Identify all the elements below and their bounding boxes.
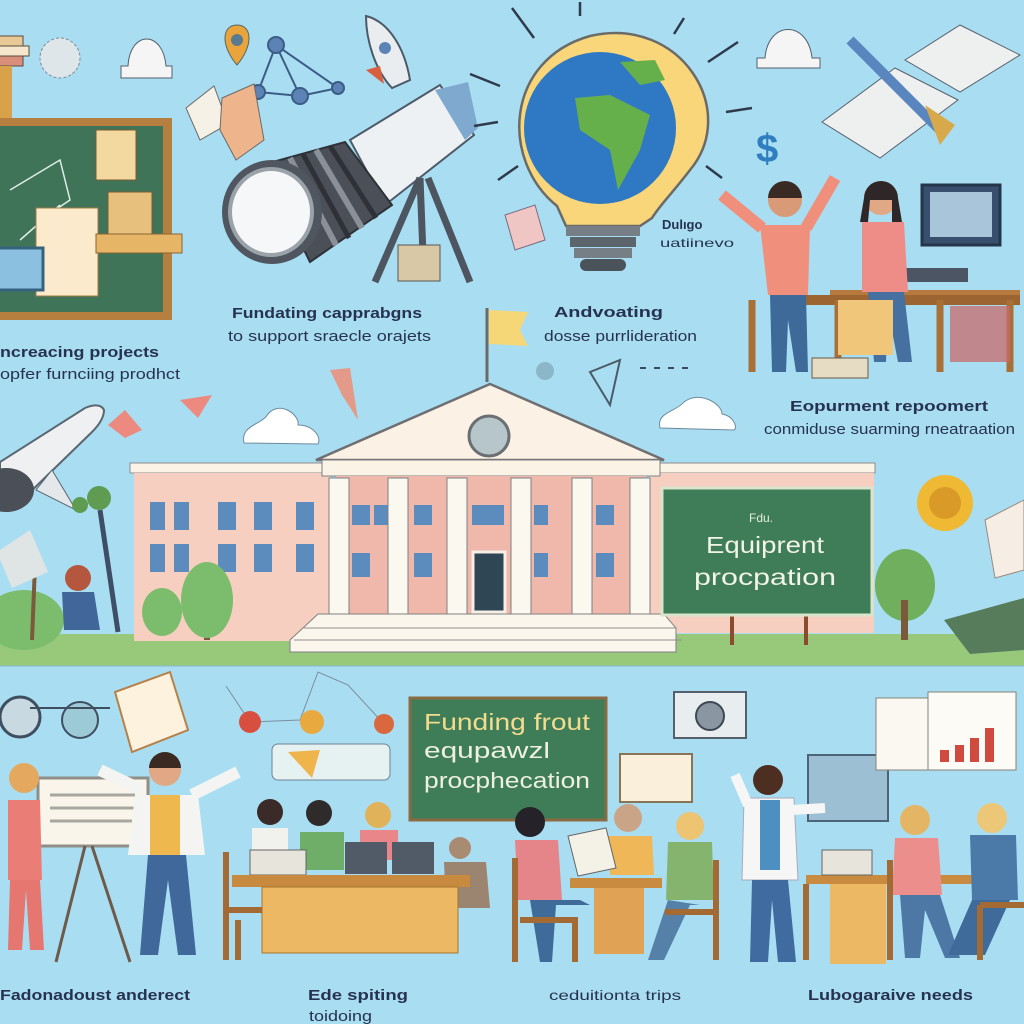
text: dulgo: uatiinevo [660, 236, 734, 250]
text: equipment report: Eopurment repoomert [790, 398, 988, 415]
sign: funding front [410, 698, 606, 820]
scene: team at desk with laptops [226, 799, 490, 960]
text: bottom caption 3: ceduitionta trips [549, 987, 681, 1003]
text: dulgo: Dulıgo [662, 217, 702, 232]
building: central portico [290, 384, 682, 652]
text: increasing projects: ncreacing projects [0, 344, 159, 361]
text: equipment report [764, 398, 1015, 438]
icon: star figures [108, 410, 142, 438]
icons right: coin and papers [917, 475, 1024, 654]
sign: funding front: equpawzl [424, 738, 550, 763]
panel: chalkboard top left [0, 118, 182, 320]
lower section divider [0, 665, 1024, 667]
trees [0, 549, 935, 650]
icon: network nodes [226, 672, 394, 780]
scene: group at table [515, 804, 718, 962]
text: funding campaigns: Fundating capprabgns [232, 305, 422, 322]
sign: equipment preparation: Fdu. [749, 511, 773, 525]
icon: hand card [505, 205, 545, 250]
icon: rocket [366, 16, 410, 88]
building: right wing [650, 473, 874, 633]
icon: dollar sign: $ [756, 127, 778, 171]
icon: gear sphere [40, 38, 80, 78]
sign: equipment preparation: Equiprent [706, 532, 825, 558]
icon: books top left [0, 36, 29, 118]
small decorations mid [330, 360, 690, 420]
text: bottom caption 4: Lubogaraive needs [808, 987, 973, 1004]
icon: dome right [757, 30, 820, 68]
icon: molecule [251, 37, 344, 104]
icon: dome [121, 39, 172, 78]
scene: desk with two women [806, 803, 1024, 964]
text: bottom caption 2: Ede spiting [308, 987, 408, 1004]
icon: paper shapes [186, 84, 264, 160]
sign: funding front: Funding frout [424, 709, 591, 735]
text: annovating: Andvoating [554, 304, 663, 321]
sign: equipment preparation: procpation [694, 564, 836, 590]
scene: presenter in white coat [735, 765, 825, 962]
text: increasing projects: opfer furnciing prodhct [0, 366, 181, 383]
text: bottom caption 2 [308, 987, 408, 1024]
text: bottom caption 1: Fadonadoust anderect [0, 987, 190, 1004]
icon: machine [808, 755, 888, 821]
text: equipment report: conmiduse suarming rneatraation [764, 421, 1015, 438]
sign: funding front: procphecation [424, 768, 590, 793]
icon: documents [115, 672, 188, 752]
icon: tablet [620, 754, 692, 802]
chart paper [876, 692, 1016, 770]
ground [0, 634, 1024, 666]
text: annovating [544, 304, 697, 345]
text: annovating: dosse purrlideration [544, 328, 697, 345]
text: increasing projects [0, 344, 181, 383]
scene: people at desk with computer [722, 178, 1020, 378]
icon: child and instrument left [0, 486, 118, 632]
icon: light bulb with globe [470, 2, 752, 271]
icon: map pin [225, 25, 249, 65]
scene: lecturers at presentation board [8, 752, 238, 962]
text: dulgo [660, 217, 734, 250]
icon: clouds [244, 408, 319, 444]
sign: equipment preparation [662, 488, 872, 645]
icon: flag [487, 308, 528, 382]
text: funding campaigns [228, 305, 431, 345]
telescope [222, 82, 478, 282]
text: funding campaigns: to support sraecle orajets [228, 328, 431, 345]
building: left wing [130, 463, 875, 641]
icon: rocket left [0, 405, 104, 512]
icon: camera [674, 692, 746, 738]
icon: left clock [0, 697, 110, 738]
icon: satellite [822, 25, 1020, 158]
